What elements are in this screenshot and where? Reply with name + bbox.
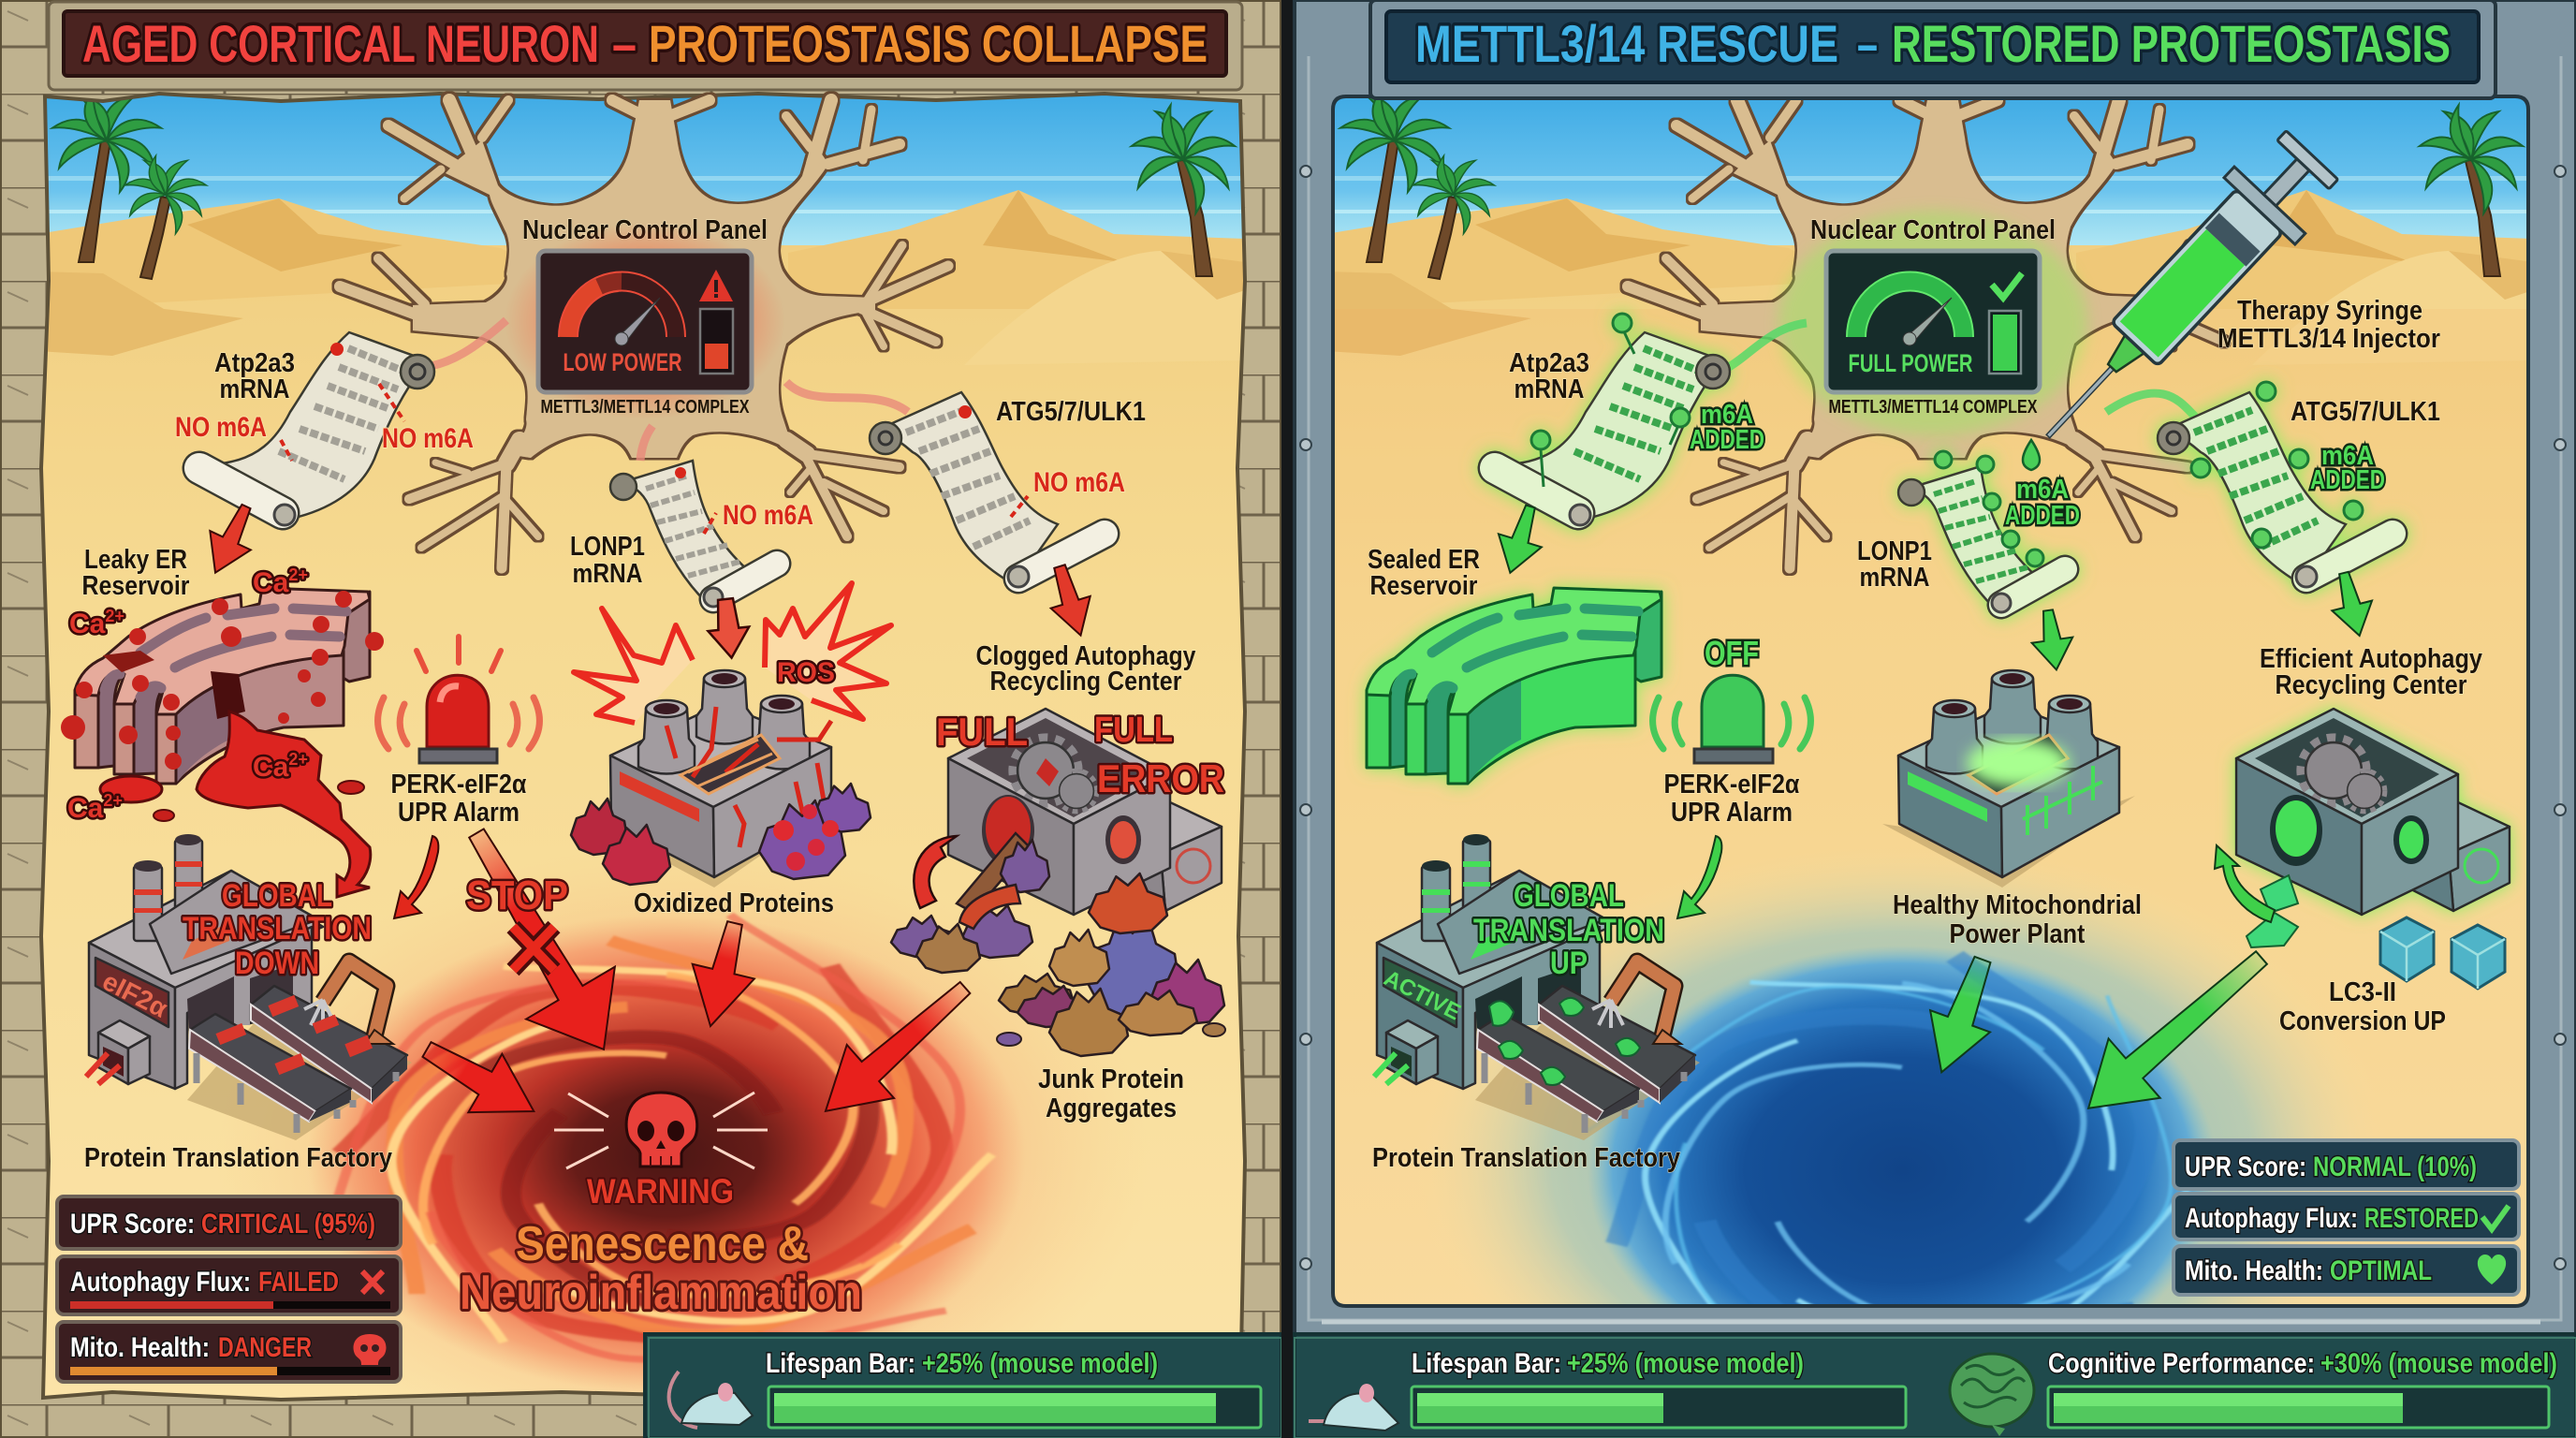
NO m6A tags on Atp2a3 xyxy=(175,384,474,461)
label: Healthy Mitochondrial Power Plant: Power Plant xyxy=(1949,919,2086,949)
status: mito health danger xyxy=(57,1322,401,1382)
complex caption: METTL3/METTL14 COMPLEX xyxy=(541,397,750,418)
arrow: alarm to factory, green xyxy=(1677,836,1721,918)
labels: FULL FULL ERROR: FULL xyxy=(936,710,1028,754)
m6A ADDED tag 2: m6A xyxy=(2016,475,2069,505)
status: UPR score normal: UPR Score: xyxy=(2185,1152,2306,1182)
NO m6A tag on ATG xyxy=(1011,467,1125,517)
label: ATG5/7/ULK1: ATG5/7/ULK1 xyxy=(996,397,1146,427)
label: Atp2a3, right xyxy=(1509,348,1589,404)
status: mito health optimal xyxy=(2174,1246,2519,1295)
right panel background: desert scene xyxy=(1325,84,2542,1416)
m6A ADDED tag 3: ADDED xyxy=(2310,465,2385,495)
m6A ADDED tag 2 xyxy=(2005,475,2080,531)
therapy syringe xyxy=(2012,122,2348,470)
arrow: LC3 to vortex xyxy=(2063,928,2288,1137)
Ca2+ labels: 2+ xyxy=(103,791,123,810)
NO m6A tags on Atp2a3: NO m6A xyxy=(175,412,267,443)
status: mito health optimal: Mito. Health: xyxy=(2185,1255,2323,1286)
label: Healthy Mitochondrial Power Plant xyxy=(1893,890,2142,949)
m6A ADDED tag 1: ADDED xyxy=(1690,425,1764,455)
title banner: left xyxy=(49,2,1242,90)
center divider xyxy=(1281,0,1295,1438)
label: GLOBAL TRANSLATION DOWN: GLOBAL xyxy=(222,878,332,914)
status: mito health danger: DANGER xyxy=(218,1332,312,1363)
status: mito health optimal: OPTIMAL xyxy=(2330,1255,2432,1286)
label: GLOBAL TRANSLATION UP xyxy=(1473,878,1664,981)
cognitive performance text and bar: Cognitive Performance: xyxy=(2048,1348,2315,1379)
scroll: LONP1 mRNA xyxy=(610,461,777,607)
arrow: power plant to vortex xyxy=(1911,948,2012,1083)
label: Clogged Autophagy: Clogged Autophagy xyxy=(975,641,1196,671)
arrow: stop arrow into vortex xyxy=(432,807,648,1076)
protein translation factory: active xyxy=(1374,834,1700,1140)
neuron: left xyxy=(340,100,948,568)
NO m6A tag on LONP1 xyxy=(704,500,813,534)
mitochondrial plant: failing xyxy=(594,670,847,888)
protein translation factory: down: eIF2α xyxy=(98,966,172,1023)
arrow: Atp2a3 to ER xyxy=(195,497,267,582)
red vortex glow on sand xyxy=(215,845,1151,1438)
status: autophagy flux failed: Autophagy Flux: xyxy=(70,1267,251,1298)
icon: green droplet xyxy=(2023,440,2040,470)
label: Efficient Autophagy xyxy=(2260,644,2482,700)
Ca2+ labels xyxy=(67,565,308,824)
label: Therapy Syringe: METTL3/14 Injector xyxy=(2217,324,2440,354)
label: Sealed ER Reservoir xyxy=(1368,545,1480,601)
status: UPR score critical: CRITICAL (95%) xyxy=(201,1209,375,1240)
title banner: right: METTL3/14 RESCUE xyxy=(1415,14,1838,73)
label: LONP1, right xyxy=(1857,536,1932,593)
label: LONP1 mRNA: mRNA xyxy=(573,559,643,589)
label: STOP with X: STOP xyxy=(466,873,568,918)
arrow: LONP1 to power plant xyxy=(2027,608,2077,672)
status: mito health danger: Mito. Health: xyxy=(70,1332,210,1363)
title banner: right xyxy=(1370,0,2496,98)
arrow: alarm to factory xyxy=(394,836,438,918)
status: UPR score normal xyxy=(2174,1140,2519,1189)
Ca2+ labels: 2+ xyxy=(288,750,308,769)
label: Junk Protein Aggregates xyxy=(1038,1064,1184,1123)
oxidized protein blobs xyxy=(571,784,871,885)
status: autophagy flux failed xyxy=(57,1256,401,1314)
headline: Senescence & Neuroinflammation: Senescence & xyxy=(516,1217,809,1271)
blue vortex glow on sand xyxy=(1415,843,2389,1438)
complex caption: right: METTL3/METTL14 COMPLEX xyxy=(1829,397,2038,418)
nuclear control panel label: right: Nuclear Control Panel xyxy=(1810,215,2056,245)
ER: leaky, red xyxy=(61,588,384,897)
label: Atp2a3 mRNA xyxy=(214,348,295,404)
m6A ADDED tag 1: m6A xyxy=(1701,400,1753,430)
icon: PERK alarm, red xyxy=(378,637,539,763)
status: UPR score normal: NORMAL (10%) xyxy=(2313,1152,2477,1182)
title banner: left: PROTEOSTASIS COLLAPSE xyxy=(649,14,1208,73)
recycling machine: clogged xyxy=(948,709,1222,915)
Ca2+ labels: Ca xyxy=(253,567,288,598)
status: UPR score critical xyxy=(57,1196,401,1249)
label: Leaky ER Reservoir xyxy=(82,545,189,601)
protein translation factory: down xyxy=(86,834,412,1140)
Ca2+ labels: 2+ xyxy=(105,607,124,625)
label: Therapy Syringe xyxy=(2217,296,2440,354)
label: LC3-II Conversion UP: Conversion UP xyxy=(2279,1006,2446,1036)
label: Atp2a3, right: mRNA xyxy=(1515,374,1585,404)
label: GLOBAL TRANSLATION DOWN xyxy=(183,878,372,981)
label: LONP1 mRNA xyxy=(570,532,645,589)
labels: FULL FULL ERROR: FULL xyxy=(1094,711,1173,750)
label: GLOBAL TRANSLATION DOWN: DOWN xyxy=(235,946,319,981)
protein translation factory: active: ACTIVE xyxy=(1380,965,1465,1025)
scroll: ATG5/7/ULK1 xyxy=(870,392,1105,587)
lifespan text and bar: +25% (mouse model) xyxy=(1567,1348,1804,1379)
label: LONP1 mRNA: LONP1 xyxy=(570,532,645,562)
arrow: oxidized proteins to vortex xyxy=(680,916,766,1034)
scroll: LONP1, methylated xyxy=(1898,451,2065,612)
label: Protein Translation Factory, right: Protein Translation Factory xyxy=(1372,1143,1680,1173)
NO m6A tags on Atp2a3: NO m6A xyxy=(382,423,474,454)
label: Clogged Autophagy xyxy=(975,641,1196,697)
recycled fragments and curved arrow xyxy=(2215,845,2298,947)
headline: Senescence & Neuroinflammation xyxy=(460,1217,862,1320)
label: PERK-eIF2α UPR Alarm: UPR Alarm xyxy=(398,798,520,828)
m6A ADDED tag 3: m6A xyxy=(2321,441,2374,471)
scroll: ATG, methylated xyxy=(2158,382,2393,587)
label: ATG5/7/ULK1, right: ATG5/7/ULK1 xyxy=(2291,397,2440,427)
control panel: low power: LOW POWER xyxy=(564,348,681,376)
junk protein aggregates xyxy=(997,873,1225,1056)
label: STOP with X xyxy=(466,873,568,970)
mRNA ribbons: left xyxy=(431,320,908,461)
label: Sealed ER Reservoir: Reservoir xyxy=(1370,571,1477,601)
Ca2+ labels: Ca xyxy=(253,752,288,783)
label: GLOBAL TRANSLATION UP: GLOBAL xyxy=(1514,878,1624,914)
panel frame: riveted metal xyxy=(1295,0,2576,1334)
headline: Senescence & Neuroinflammation: Neuroinflammation xyxy=(460,1266,862,1320)
label: PERK alarm, right: UPR Alarm xyxy=(1671,798,1793,828)
status: autophagy flux failed: FAILED xyxy=(258,1267,339,1298)
vortex: healthy blue swirl xyxy=(1536,899,2295,1438)
title banner: left: – xyxy=(612,14,637,73)
cognitive performance text and bar xyxy=(2048,1348,2557,1428)
Ca2+ labels: Ca xyxy=(69,609,105,639)
arrow: ATG to recycling center xyxy=(2324,568,2379,640)
lifespan bar panel: left xyxy=(645,1334,1281,1438)
junk under machine xyxy=(891,833,1049,973)
label: Atp2a3 mRNA: Atp2a3 xyxy=(214,348,295,378)
Ca2+ labels: Ca xyxy=(67,793,103,824)
label: Junk Protein Aggregates: Aggregates xyxy=(1046,1093,1177,1123)
label: Junk Protein Aggregates: Junk Protein xyxy=(1038,1064,1184,1094)
lifespan text and bar: Lifespan Bar: xyxy=(1412,1348,1561,1379)
label: LC3-II Conversion UP xyxy=(2279,977,2446,1036)
label: Clogged Autophagy: Recycling Center xyxy=(990,667,1181,697)
ROS bursts: ROS xyxy=(777,657,835,688)
icon: mouse xyxy=(1309,1384,1398,1431)
recycling machine: efficient xyxy=(2236,709,2510,915)
label: Sealed ER Reservoir: Sealed ER xyxy=(1368,545,1480,575)
left panel background: desert scene xyxy=(37,84,1254,1416)
arrow: Atp2a3 to sealed ER xyxy=(1488,500,1552,580)
control panel: low power xyxy=(505,223,785,419)
status: autophagy restored xyxy=(2174,1194,2519,1240)
bottom stats panel: right xyxy=(1295,1334,2576,1438)
arrow: ATG to recycling xyxy=(1040,561,1101,641)
m6A ADDED tag 1 xyxy=(1690,400,1764,455)
label: WARNING: WARNING xyxy=(587,1172,734,1211)
lifespan bar panel: left: +25% (mouse model) xyxy=(922,1348,1158,1379)
label: Oxidized Proteins: Oxidized Proteins xyxy=(634,888,834,918)
NO m6A tag on ATG: NO m6A xyxy=(1033,467,1125,498)
NO m6A tag on LONP1: NO m6A xyxy=(723,500,813,531)
arrow: junk to vortex xyxy=(802,961,988,1137)
label: Leaky ER Reservoir: Reservoir xyxy=(82,571,189,601)
neuron: right xyxy=(1628,100,2236,568)
icon: brain xyxy=(1950,1354,2034,1436)
warmer sand tint xyxy=(1333,309,2528,1320)
scroll: Atp2a3, methylated xyxy=(1495,314,1730,525)
control panel: full power xyxy=(1826,251,2040,392)
arrow: LONP1 to plant xyxy=(705,597,752,660)
icon: PERK alarm, green xyxy=(1653,675,1810,763)
ROS bursts xyxy=(574,583,891,723)
nuclear control panel label: Nuclear Control Panel xyxy=(522,215,768,245)
title banner: left: AGED CORTICAL NEURON xyxy=(82,14,599,73)
label: Efficient Autophagy: Recycling Center xyxy=(2275,670,2467,700)
ER: sealed, green xyxy=(1367,588,1661,784)
label: Atp2a3 mRNA: mRNA xyxy=(219,374,290,404)
control panel: full power: FULL POWER xyxy=(1848,349,1973,377)
arrow: factory to vortex xyxy=(410,1020,550,1140)
status: autophagy restored: Autophagy Flux: xyxy=(2185,1203,2358,1234)
label: Healthy Mitochondrial Power Plant: Healthy Mitochondrial xyxy=(1893,890,2142,920)
label: Therapy Syringe: Therapy Syringe xyxy=(2237,296,2422,326)
scroll: Atp2a3 mRNA xyxy=(199,332,434,525)
label: Protein Translation Factory: Protein Translation Factory xyxy=(84,1143,392,1173)
Ca2+ labels: 2+ xyxy=(288,565,308,584)
title banner: right: – xyxy=(1857,14,1878,73)
icon: skull warning xyxy=(554,1093,768,1168)
label: LONP1, right: mRNA xyxy=(1859,563,1930,593)
status: autophagy restored: RESTORED xyxy=(2364,1203,2479,1234)
panel frame: cracked stone xyxy=(0,0,1281,1438)
mitochondrial power plant: healthy xyxy=(1882,670,2135,888)
green glow on soma xyxy=(1778,211,2087,435)
labels: FULL FULL ERROR xyxy=(936,710,1224,800)
label: GLOBAL TRANSLATION DOWN: TRANSLATION xyxy=(183,911,372,946)
label: Leaky ER Reservoir: Leaky ER xyxy=(84,545,187,575)
status: UPR score critical: UPR Score: xyxy=(70,1209,195,1240)
label: GLOBAL TRANSLATION UP: UP xyxy=(1550,946,1588,981)
m6A ADDED tag 2: ADDED xyxy=(2005,501,2080,531)
label: PERK-eIF2α UPR Alarm xyxy=(391,770,527,828)
mRNA ribbons: right xyxy=(1724,323,2195,417)
label: PERK alarm, right xyxy=(1664,770,1800,828)
label: OFF: OFF xyxy=(1705,634,1759,672)
LC3-II cubes xyxy=(2380,917,2505,989)
lifespan bar panel: left: Lifespan Bar: xyxy=(766,1348,915,1379)
label: LC3-II Conversion UP: LC3-II xyxy=(2329,977,2396,1007)
lifespan text and bar xyxy=(1412,1348,1906,1428)
m6A ADDED tag 3 xyxy=(2310,441,2385,495)
label: PERK-eIF2α UPR Alarm: PERK-eIF2α xyxy=(391,770,527,800)
labels: FULL FULL ERROR: ERROR xyxy=(1097,756,1224,800)
label: GLOBAL TRANSLATION UP: TRANSLATION xyxy=(1473,913,1664,948)
label: PERK alarm, right: PERK-eIF2α xyxy=(1664,770,1800,800)
label: Efficient Autophagy: Efficient Autophagy xyxy=(2260,644,2482,674)
label: Atp2a3, right: Atp2a3 xyxy=(1509,348,1589,378)
label: LONP1, right: LONP1 xyxy=(1857,536,1932,566)
vortex: senescence swirl xyxy=(227,883,1046,1438)
